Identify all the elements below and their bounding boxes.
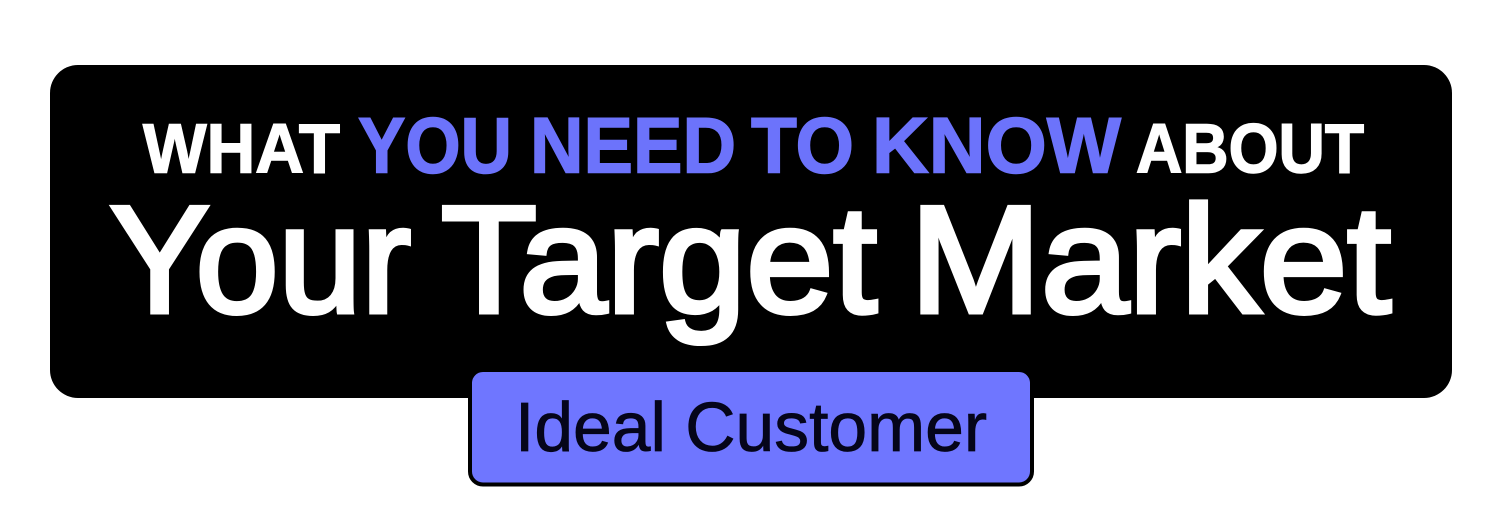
highlighted phrase: YOU NEED TO KNOW: YOU xyxy=(358,100,512,190)
main title: Your Target Market: Target xyxy=(441,175,877,345)
highlighted phrase: YOU NEED TO KNOW xyxy=(358,100,1121,190)
main title: Your Target Market: Market xyxy=(910,175,1391,345)
main title: Your Target Market xyxy=(110,175,1391,345)
word: WHAT: WHAT xyxy=(143,110,340,188)
main title: Your Target Market: Your xyxy=(110,175,411,345)
highlighted phrase: YOU NEED TO KNOW: KNOW xyxy=(872,100,1121,190)
badge: Ideal Customer xyxy=(470,370,1032,484)
badge label: Ideal Customer xyxy=(515,388,987,466)
heading line: what you need to know about xyxy=(143,100,1364,190)
highlighted phrase: YOU NEED TO KNOW: NEED xyxy=(530,100,736,190)
highlighted phrase: YOU NEED TO KNOW: TO xyxy=(751,100,854,190)
panel: black title banner xyxy=(50,65,1452,398)
badge box xyxy=(470,370,1032,484)
word: ABOUT: ABOUT xyxy=(1136,110,1364,188)
